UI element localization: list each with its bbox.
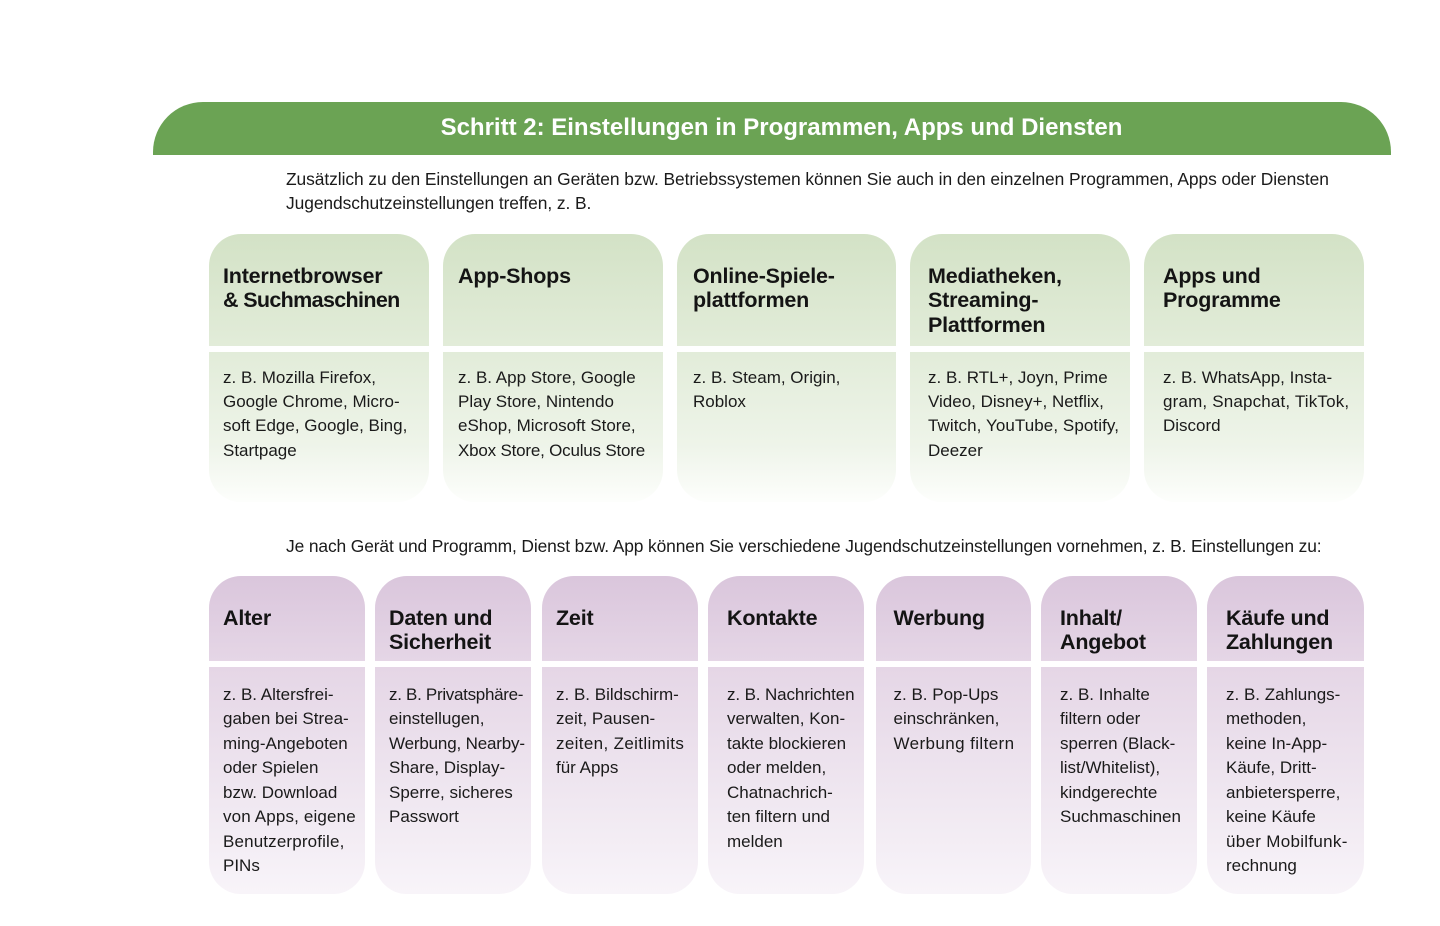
panel: Alter (209, 576, 365, 894)
heading: Inhalt/Angebot (1041, 576, 1197, 661)
panel: Online-Spiele-plattformen (677, 234, 896, 486)
text: Zeit examples: für Apps (556, 758, 618, 777)
text: App-Shops examples: Xbox Store, Oculus Store (458, 441, 645, 460)
text: Käufe examples: z. B. Zahlungs- (1226, 685, 1340, 704)
text: Kontakte examples: oder melden, (727, 758, 826, 777)
text: App-Shops examples (443, 352, 663, 502)
heading: Zeit: Zeit (556, 606, 593, 630)
text: Käufe examples: methoden, (1226, 709, 1306, 728)
text: Werbung examples: einschränken, (894, 709, 999, 728)
heading: Zeit (542, 576, 698, 661)
panel: Apps und Programme (1144, 234, 1364, 486)
text: Internetbrowser examples (209, 352, 429, 502)
text: Werbung examples (876, 667, 1031, 894)
text: Internetbrowser examples: Startpage (223, 441, 297, 460)
panel: Daten und Sicherheit (375, 576, 531, 894)
text: Inhalt examples: Suchmaschinen (1060, 807, 1181, 826)
text: Apps examples: Discord (1163, 416, 1221, 435)
text: Kontakte examples: Chatnachrich- (727, 783, 833, 802)
text: Alter examples: ming-Angeboten (223, 734, 348, 753)
text: Kontakte examples: ten filtern und (727, 807, 830, 826)
panel: Werbung (876, 576, 1031, 894)
text: Zeit examples: zeiten, Zeitlimits (556, 734, 684, 753)
heading: Kontakte (708, 576, 864, 661)
heading: Online-Spiele-plattformen (677, 234, 896, 346)
heading: Inhalt/Angebot: Angebot (1060, 630, 1146, 654)
text: Käufe examples: anbietersperre, (1226, 783, 1340, 802)
second intro text: Je nach Gerät und Programm, Dienst bzw. App können Sie verschiedene Jugendschutzeinstellungen vornehmen, z. B. Einstellungen zu: (286, 536, 1321, 556)
heading: Werbung: Werbung (894, 606, 985, 630)
text: Daten examples: Share, Display- (389, 758, 505, 777)
text: Internetbrowser examples: soft Edge, Google, Bing, (223, 416, 407, 435)
heading: Apps und Programme: Apps und (1163, 264, 1261, 288)
heading: Daten und Sicherheit: Sicherheit (389, 630, 491, 654)
text: Kontakte examples (708, 667, 864, 894)
text: Mediatheken examples: Twitch, YouTube, Spotify, (928, 416, 1119, 435)
text: Daten examples (375, 667, 531, 894)
panel: Mediatheken (910, 234, 1130, 486)
text: Inhalt examples: kindgerechte (1060, 783, 1157, 802)
heading: Käufe und Zahlungen: Zahlungen (1226, 630, 1333, 654)
text: Inhalt examples: sperren (Black- (1060, 734, 1175, 753)
intro text (286, 169, 1329, 213)
text: Alter examples: gaben bei Strea- (223, 709, 349, 728)
text: Käufe examples (1207, 667, 1364, 894)
text: Mediatheken examples: Video, Disney+, Netflix, (928, 392, 1104, 411)
text: Zeit examples: z. B. Bildschirm- (556, 685, 679, 704)
text: Online-Spiele examples (677, 352, 896, 502)
heading: Alter (209, 576, 365, 661)
text: Alter examples: PINs (223, 856, 260, 875)
title banner: Schritt 2: Einstellungen in Programmen, Apps und Diensten (441, 114, 1122, 141)
text: App-Shops examples: Play Store, Nintendo (458, 392, 614, 411)
heading: Käufe und Zahlungen: Käufe und (1226, 606, 1329, 630)
heading: Mediatheken (910, 234, 1130, 346)
text: Alter examples (209, 667, 365, 894)
heading: Kontakte: Kontakte (727, 606, 817, 630)
panel: Internetbrowser & Suchmaschinen (209, 234, 429, 486)
panel: Käufe und Zahlungen (1207, 576, 1364, 894)
heading: Internetbrowser: Internetbrowser (223, 264, 382, 288)
heading: Online-Spiele-plattformen: plattformen (693, 288, 809, 312)
text: Mediatheken examples: Deezer (928, 441, 983, 460)
panel: Inhalt/Angebot (1041, 576, 1197, 894)
text: Alter examples: von Apps, eigene (223, 807, 356, 826)
heading: Inhalt/Angebot: Inhalt/ (1060, 606, 1122, 630)
text: Daten examples: z. B. Privatsphäre- (389, 685, 523, 704)
text: Daten examples: Passwort (389, 807, 459, 826)
text: Werbung examples: Werbung filtern (894, 734, 1014, 753)
text: Apps examples: gram, Snapchat, TikTok, (1163, 392, 1349, 411)
text: Alter examples: bzw. Download (223, 783, 337, 802)
heading: Internetbrowser (209, 234, 429, 346)
text: Daten examples: einstellugen, (389, 709, 484, 728)
text: Online-Spiele examples: Roblox (693, 392, 746, 411)
panel: App-Shops (443, 234, 663, 486)
intro text: Zusätzlich zu den Einstellungen an Geräten bzw. Betriebssystemen können Sie auch in den einzelnen Programmen, Apps oder Diensten (286, 169, 1329, 189)
heading: Online-Spiele-plattformen: Online-Spiele- (693, 264, 835, 288)
text: App-Shops examples: z. B. App Store, Google (458, 368, 636, 386)
text: Alter examples: Benutzerprofile, (223, 832, 344, 851)
text: Kontakte examples: verwalten, Kon- (727, 709, 845, 728)
text: Inhalt examples: z. B. Inhalte (1060, 685, 1150, 704)
heading: Werbung (876, 576, 1031, 661)
text: App-Shops examples: eShop, Microsoft Store, (458, 416, 636, 435)
text: Apps examples (1144, 352, 1364, 502)
intro text: Jugendschutzeinstellungen treffen, z. B. (286, 193, 591, 213)
heading: Alter: Alter (223, 606, 271, 630)
text: Daten examples: Sperre, sicheres (389, 783, 513, 802)
text: Käufe examples: Käufe, Dritt- (1226, 758, 1317, 777)
heading: Apps und Programme (1144, 234, 1364, 346)
heading: Käufe und Zahlungen (1207, 576, 1364, 661)
text: Kontakte examples: takte blockieren (727, 734, 846, 753)
title banner (153, 102, 1391, 155)
panel: Kontakte (708, 576, 864, 894)
heading: Internetbrowser: & Suchmaschinen (223, 288, 400, 312)
heading: Daten und Sicherheit (375, 576, 531, 661)
heading: App-Shops (443, 234, 663, 346)
text: Werbung examples: z. B. Pop-Ups (894, 685, 998, 704)
heading: Daten und Sicherheit: Daten und (389, 606, 492, 630)
text: Inhalt examples: list/Whitelist), (1060, 758, 1160, 777)
text: Internetbrowser examples: z. B. Mozilla Firefox, (223, 368, 376, 386)
heading: Mediatheken: Plattformen (928, 313, 1045, 337)
text: Mediatheken examples: z. B. RTL+, Joyn, Prime (928, 368, 1108, 386)
text: Käufe examples: keine Käufe (1226, 807, 1316, 826)
text: Inhalt examples (1041, 667, 1197, 894)
heading: Mediatheken: Streaming- (928, 288, 1038, 312)
text: Kontakte examples: melden (727, 832, 783, 851)
text: Internetbrowser examples: Google Chrome, Micro- (223, 392, 400, 411)
text: Apps examples: z. B. WhatsApp, Insta- (1163, 368, 1332, 386)
text: Inhalt examples: filtern oder (1060, 709, 1140, 728)
heading: Mediatheken: Mediatheken, (928, 264, 1062, 288)
text: Online-Spiele examples: z. B. Steam, Origin, (693, 368, 840, 386)
text: Alter examples: z. B. Altersfrei- (223, 685, 334, 704)
text: Alter examples: oder Spielen (223, 758, 318, 777)
text: Zeit examples: zeit, Pausen- (556, 709, 655, 728)
text: Daten examples: Werbung, Nearby- (389, 734, 525, 753)
text: Mediatheken examples (910, 352, 1130, 502)
text: Zeit examples (542, 667, 698, 894)
panel: Zeit (542, 576, 698, 894)
text: Kontakte examples: z. B. Nachrichten (727, 685, 854, 704)
text: Käufe examples: rechnung (1226, 856, 1297, 875)
heading: App-Shops: App-Shops (458, 264, 571, 288)
text: Käufe examples: keine In-App- (1226, 734, 1327, 753)
text: Käufe examples: über Mobilfunk- (1226, 832, 1348, 851)
heading: Apps und Programme: Programme (1163, 288, 1281, 312)
